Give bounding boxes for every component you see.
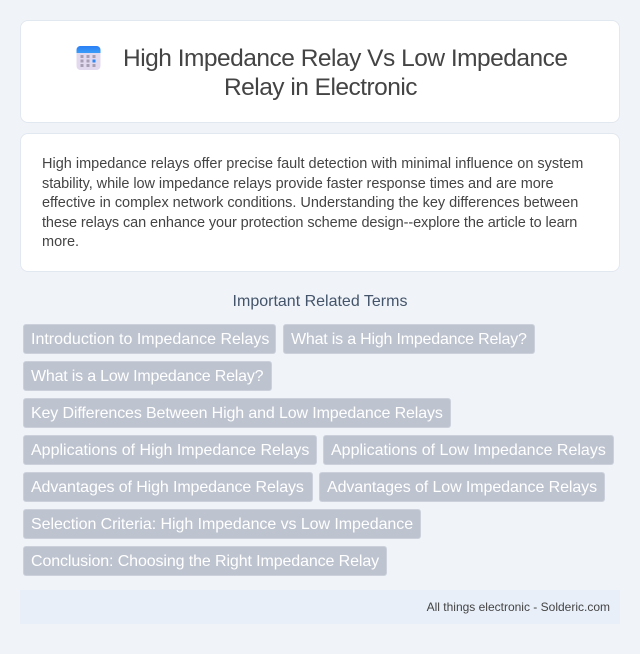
intro text: these relays can enhance your protection scheme design--explore the article to learn (42, 215, 577, 231)
title (123, 45, 568, 101)
chip (23, 361, 272, 391)
intro text: stability, while low impedance relays provide faster response times and are more (42, 176, 554, 192)
footer bar (20, 590, 620, 624)
chip (23, 472, 313, 502)
intro text (42, 156, 583, 250)
footer text: All things electronic - Solderic.com (427, 600, 610, 614)
chip: Selection Criteria: High Impedance vs Low Impedance (31, 516, 413, 533)
chip (23, 398, 451, 428)
chip (23, 546, 387, 576)
chip: Conclusion: Choosing the Right Impedance Relay (31, 553, 379, 570)
chip: Introduction to Impedance Relays (31, 331, 269, 348)
chip: What is a Low Impedance Relay? (31, 368, 263, 385)
header panel (20, 20, 620, 123)
intro text: High impedance relays offer precise fault detection with minimal influence on system (42, 156, 583, 172)
chip: Applications of Low Impedance Relays (331, 442, 606, 459)
chip (319, 472, 605, 502)
chip (23, 509, 421, 539)
title: Relay in Electronic (224, 74, 417, 101)
intro text: more. (42, 234, 79, 250)
title: High Impedance Relay Vs Low Impedance (123, 45, 568, 72)
intro text: effective in complex network conditions. Understanding the key differences between (42, 195, 578, 211)
heading: important related terms: Important Related Terms (233, 293, 407, 310)
chip (283, 324, 535, 354)
chip (323, 435, 614, 465)
chip (23, 435, 317, 465)
chip: What is a High Impedance Relay? (291, 331, 527, 348)
chip: Advantages of Low Impedance Relays (327, 479, 597, 496)
chip: Applications of High Impedance Relays (31, 442, 309, 459)
chip: Key Differences Between High and Low Impedance Relays (31, 405, 443, 422)
related terms chips (23, 324, 614, 576)
chip (23, 324, 276, 354)
chip: Advantages of High Impedance Relays (31, 479, 304, 496)
intro panel (20, 133, 620, 272)
icon: calendar (76, 46, 100, 70)
